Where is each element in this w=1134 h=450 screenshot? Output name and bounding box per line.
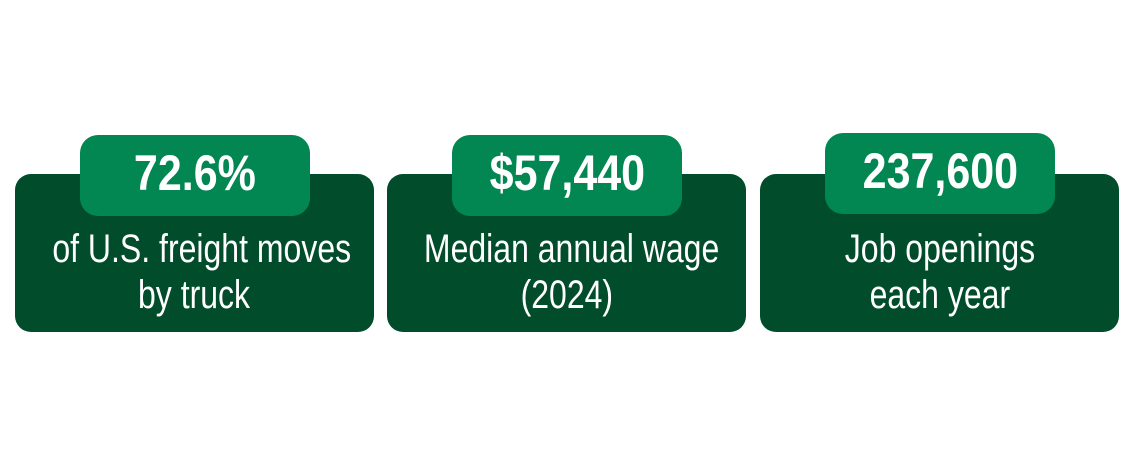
panel: job openings	[760, 174, 1119, 332]
badge: 237,600	[825, 133, 1055, 214]
badge: $57,440	[452, 135, 682, 216]
badge: 237,600: 237,600	[862, 143, 1018, 199]
text: wage description	[424, 227, 719, 317]
text: job openings description	[844, 227, 1035, 317]
text: freight description: by truck	[138, 273, 251, 317]
panel: wage	[387, 174, 746, 332]
panel: freight	[15, 174, 374, 332]
badge: 72.6%: 72.6%	[134, 145, 256, 201]
text: freight description: of U.S. freight moves	[52, 227, 351, 271]
text: freight description	[52, 227, 351, 317]
badge: 72.6%	[80, 135, 310, 216]
badge: $57,440: $57,440	[489, 145, 645, 201]
text: wage description: (2024)	[520, 273, 613, 317]
text: wage description: Median annual wage	[424, 227, 719, 271]
text: job openings description: Job openings	[844, 227, 1035, 271]
text: job openings description: each year	[869, 273, 1010, 317]
